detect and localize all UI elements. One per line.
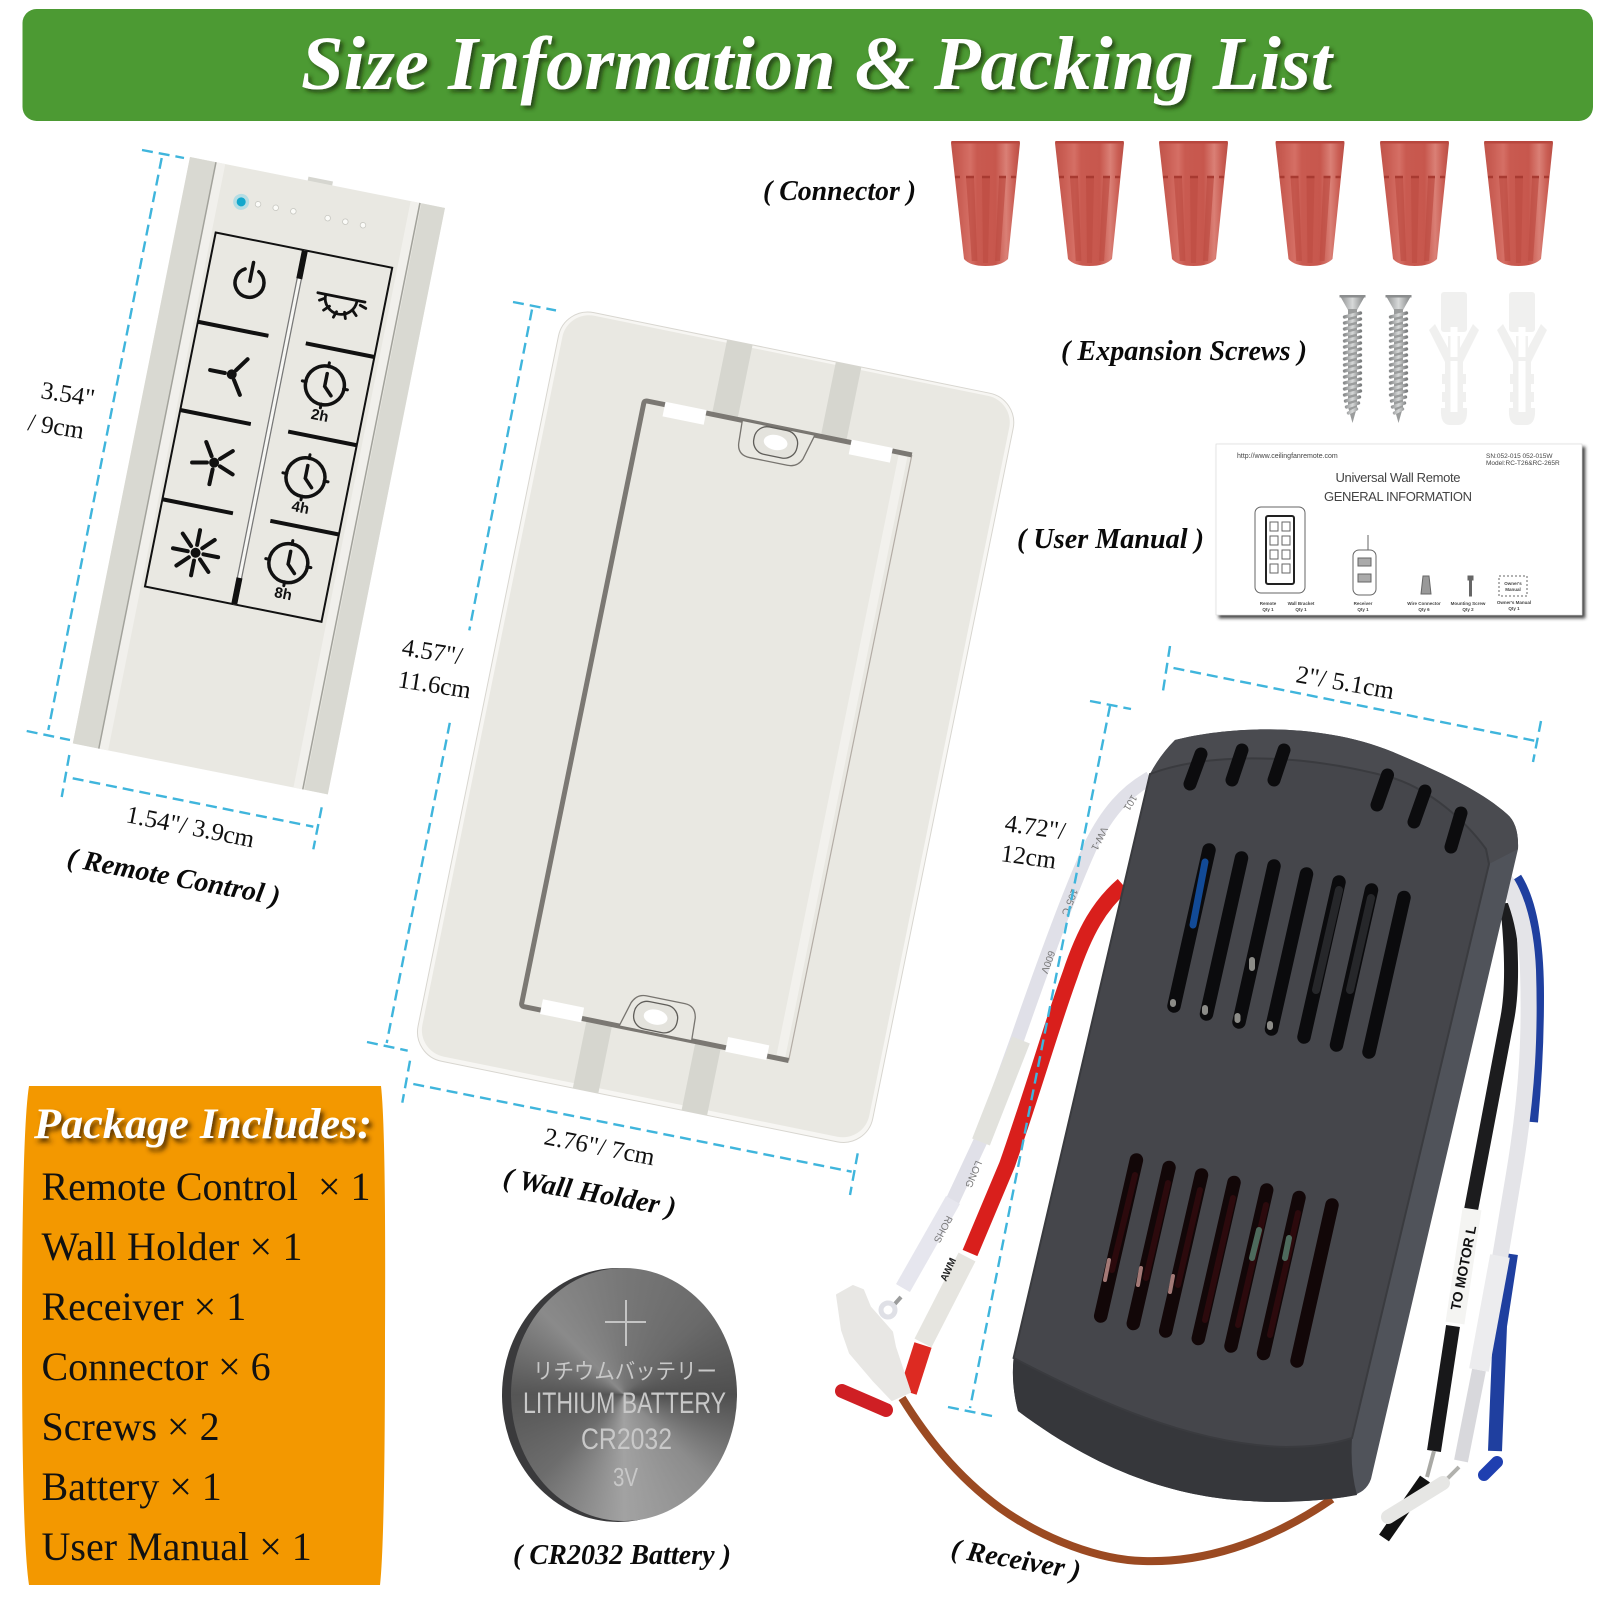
battery xyxy=(502,1268,737,1522)
left sleeve print: AWM xyxy=(939,1256,959,1283)
remote height label: 3.54" xyxy=(39,377,97,412)
left wires xyxy=(881,778,1150,1392)
user manual: GENERAL INFORMATION xyxy=(1324,489,1472,504)
button panel xyxy=(145,233,392,622)
wall holder height label: 4.57"/ xyxy=(400,634,464,670)
icon: fan medium xyxy=(189,440,238,488)
LED indicators xyxy=(232,192,367,235)
left sleeve print: LONG xyxy=(962,1159,983,1189)
wall holder xyxy=(412,307,1019,1148)
package includes panel xyxy=(22,1086,385,1585)
remote height label xyxy=(26,377,97,445)
user manual: Universal Wall Remote xyxy=(1336,470,1460,485)
manual item labels: Remote xyxy=(1260,601,1277,606)
receiver top band xyxy=(1150,729,1518,864)
battery markings xyxy=(523,1359,726,1492)
manual item labels: Owner's xyxy=(1504,581,1522,586)
manual item labels: Wire Connector xyxy=(1407,601,1441,606)
manual item labels: Qty 2 xyxy=(1462,607,1474,612)
manual item labels: Owner's Manual xyxy=(1497,600,1531,605)
TO MOTOR L sleeve: TO MOTOR L xyxy=(1447,1224,1479,1312)
receiver xyxy=(837,729,1538,1561)
icon: power xyxy=(232,260,268,300)
icon: timer 4h: 4h xyxy=(290,498,311,518)
left sleeve print: ROHS xyxy=(931,1214,954,1245)
wire connectors xyxy=(951,141,1553,266)
remote height label: / 9cm xyxy=(26,409,86,445)
icon: light xyxy=(314,293,367,323)
packing list: Receiver × 1 xyxy=(42,1284,246,1329)
icon: timer 2h xyxy=(295,358,352,429)
manual item labels: Manual xyxy=(1505,587,1521,592)
packing list: User Manual × 1 xyxy=(42,1524,312,1569)
manual item labels xyxy=(1260,581,1531,612)
receiver dimension lines xyxy=(948,646,1541,1416)
left sleeve print: 101 xyxy=(1120,792,1139,813)
battery caption: ( CR2032 Battery ) xyxy=(513,1540,731,1571)
icon: timer 4h xyxy=(275,450,333,521)
manual diagram xyxy=(1255,507,1527,596)
wall holder height label xyxy=(396,634,473,704)
right wires xyxy=(1434,869,1538,1461)
wire tips xyxy=(1384,1451,1497,1538)
bottom latch tab xyxy=(619,992,699,1041)
packing list: Wall Holder × 1 xyxy=(42,1224,302,1269)
connector caption: ( Connector ) xyxy=(763,176,916,207)
user manual: SN:052-015 052-015W xyxy=(1486,453,1553,460)
title banner xyxy=(22,9,1593,121)
wall anchors xyxy=(1429,292,1547,425)
manual item labels: Qty 6 xyxy=(1418,607,1430,612)
receiver height label: 12cm xyxy=(999,840,1058,875)
receiver bottom band xyxy=(1013,1358,1357,1502)
user manual caption: ( User Manual ) xyxy=(1017,524,1204,555)
manual item labels: Qty 1 xyxy=(1262,607,1274,612)
packing list: Connector × 6 xyxy=(42,1344,271,1389)
red tip xyxy=(842,1391,886,1410)
icon: fan low xyxy=(207,352,248,395)
receiver height label: 4.72"/ xyxy=(1003,810,1067,845)
battery markings: CR2032 xyxy=(581,1423,672,1456)
manual item labels: Wall Bracket xyxy=(1288,601,1315,606)
expansion screws caption: ( Expansion Screws ) xyxy=(1061,336,1307,367)
receiver caption: ( Receiver ) xyxy=(949,1533,1083,1587)
title text: Size Information & Packing List xyxy=(301,22,1335,106)
remote dimension lines xyxy=(27,150,322,849)
icon: timer 8h xyxy=(258,536,315,607)
top latch tab xyxy=(735,420,815,469)
manual item labels: Qty 1 xyxy=(1508,606,1520,611)
user manual xyxy=(1216,444,1582,615)
user manual: http://www.ceilingfanremote.com xyxy=(1237,453,1338,460)
battery markings: LITHIUM BATTERY xyxy=(523,1387,726,1420)
wire terminal cap xyxy=(837,1286,910,1400)
left sleeve print: 600V xyxy=(1038,949,1057,975)
battery markings: 3V xyxy=(613,1462,639,1492)
icon: timer 8h: 8h xyxy=(273,584,293,604)
wall holder caption: ( Wall Holder ) xyxy=(501,1162,679,1223)
remote control xyxy=(73,153,446,794)
screws xyxy=(1340,295,1412,423)
receiver housing xyxy=(1013,729,1518,1502)
battery markings: リチウムバッテリー xyxy=(533,1359,717,1384)
remote control caption: ( Remote Control ) xyxy=(65,842,283,912)
manual item labels: Receiver xyxy=(1354,601,1373,606)
packing list: Screws × 2 xyxy=(42,1404,220,1449)
window opening xyxy=(520,398,912,1064)
icon: timer 2h: 2h xyxy=(310,406,330,426)
top vents xyxy=(1190,750,1461,847)
wall holder width label: 2.76"/ 7cm xyxy=(542,1123,657,1171)
remote width label: 1.54"/ 3.9cm xyxy=(124,801,257,853)
receiver face xyxy=(1014,758,1489,1447)
mounting strips xyxy=(573,339,861,1116)
manual item labels: Qty 1 xyxy=(1357,607,1369,612)
wall holder height label: 11.6cm xyxy=(396,666,473,704)
manual item labels: Mounting Screw xyxy=(1451,601,1486,606)
packing list: Remote Control × 1 xyxy=(42,1164,370,1209)
packing list xyxy=(42,1164,370,1569)
left sleeve print: 105°C xyxy=(1059,887,1079,917)
receiver height label xyxy=(999,810,1067,875)
packing list: Battery × 1 xyxy=(42,1464,222,1509)
user manual: Model:RC-T26&RC-265R xyxy=(1486,460,1560,467)
battery plus mark xyxy=(605,1300,646,1346)
panel heading: Package Includes: xyxy=(33,1101,372,1148)
brown wire xyxy=(902,1398,1332,1561)
lower vent slots xyxy=(1101,1160,1332,1361)
left sleeve print xyxy=(931,792,1139,1283)
manual item labels: Qty 1 xyxy=(1295,607,1307,612)
upper vent slots xyxy=(1173,850,1404,1052)
receiver width label: 2"/ 5.1cm xyxy=(1294,661,1397,705)
left sleeve print: VW-1 xyxy=(1088,825,1109,852)
wall holder dimension lines xyxy=(367,302,858,1195)
icon: fan high xyxy=(168,526,223,580)
